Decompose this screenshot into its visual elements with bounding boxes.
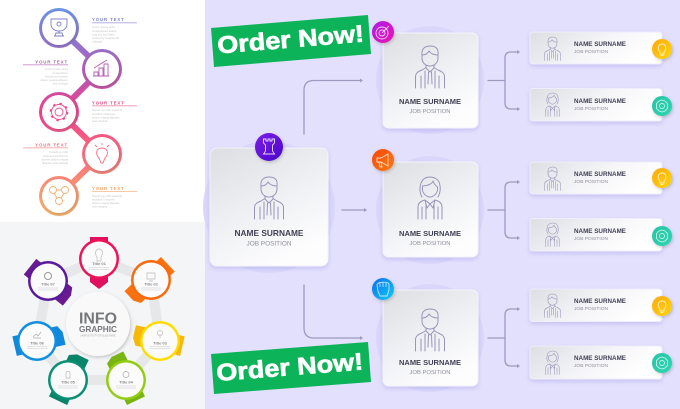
step: Title 01: Title 01 <box>92 261 107 266</box>
team card 1: NAME SURNAME <box>574 41 627 48</box>
icon: yellow bulb badge 3 <box>652 296 672 316</box>
panel: circular seven step infographic <box>12 237 185 405</box>
text block 2: consectetuer <box>52 71 68 75</box>
text block 2: erat volutpat <box>53 82 68 86</box>
banner: top Order Now <box>211 15 371 67</box>
manager card 1 <box>383 33 478 128</box>
root card: JOB POSITION <box>246 242 292 248</box>
team card 6 <box>530 346 662 379</box>
step: Title 02: Title 02 <box>144 282 159 286</box>
text block 1 <box>92 17 137 44</box>
text block 5: dolore magna aliquam <box>92 201 120 205</box>
icon: blue fist badge <box>372 278 394 300</box>
text block 1: Lorem ipsum dolor <box>92 25 115 29</box>
background: bottom-left panel <box>0 222 205 409</box>
text block 5: Nonummy nibh euismod <box>92 194 123 198</box>
text block 5: tincidunt ut laoreet <box>92 198 115 202</box>
step: Title 03 <box>131 321 185 361</box>
team card 6: NAME SURNAME <box>574 355 627 362</box>
step: Title 02 <box>124 257 175 306</box>
icon: purple chess rook badge <box>255 133 283 161</box>
text block 1: volutpat <box>92 40 102 44</box>
banner: top Order Now: Order Now! <box>216 21 365 59</box>
team card 6: JOB POSITION <box>574 363 608 368</box>
grey heptagon connector <box>37 259 160 380</box>
step: Title 04: Title 04 <box>119 380 134 384</box>
step: Title 06 <box>12 321 66 361</box>
team card 5: JOB POSITION <box>574 306 608 311</box>
text block 3: dolore magna aliquam <box>92 116 120 120</box>
team card 2 <box>530 88 662 121</box>
manager card 2: JOB POSITION <box>410 241 451 247</box>
step 2 circle with chart icon <box>82 49 122 89</box>
arrow heads <box>360 50 520 368</box>
text block 1: nonummy magna erat <box>92 36 119 40</box>
manager card 1: NAME SURNAME <box>399 97 461 106</box>
manager card 3: NAME SURNAME <box>399 358 461 367</box>
center circle: GRAPHIC <box>79 324 117 334</box>
text block 2: dolore magna aliquam <box>40 78 69 82</box>
banner: bottom Order Now <box>211 342 371 394</box>
step: Title 07 <box>24 259 75 306</box>
team card 4 <box>530 218 662 251</box>
text block 2: tincidunt ut laoreet <box>45 74 68 78</box>
team card 3: NAME SURNAME <box>574 171 627 178</box>
manager card 2: NAME SURNAME <box>399 229 461 238</box>
text block 3: tincidunt ut laoreet <box>92 112 115 116</box>
panel: org chart <box>203 21 672 392</box>
text block 1: YOUR TEXT <box>92 17 125 22</box>
text block 4: laoreet dolore magna <box>42 158 68 162</box>
team card 3: JOB POSITION <box>574 179 608 184</box>
team card 5 <box>530 289 662 322</box>
center circle: SAMPLE TEXT FOR SLIDE HERE <box>80 334 116 338</box>
step: Title 07: Title 07 <box>41 282 56 286</box>
text block 4 <box>23 142 68 165</box>
manager card 3: JOB POSITION <box>410 370 451 376</box>
text block 5: erat volutpat <box>92 204 108 208</box>
text block 4: aliquam erat volutpat <box>42 161 68 165</box>
halo circles behind cards <box>203 26 484 392</box>
team card 4: NAME SURNAME <box>574 228 627 235</box>
step: Title 03: Title 03 <box>153 340 168 346</box>
icon: teal gear badge 1 <box>652 96 672 116</box>
team card 1 <box>530 32 662 64</box>
manager card 2 <box>383 162 478 257</box>
text block 5: YOUR TEXT <box>92 186 125 191</box>
text block 3: Nonummy nibh euismod <box>92 108 123 112</box>
text block 1: consectetuer adipis <box>92 29 117 33</box>
team card 4: JOB POSITION <box>574 236 608 241</box>
center circle <box>66 292 130 356</box>
team card 1: JOB POSITION <box>574 49 608 54</box>
timeline connector <box>59 28 102 196</box>
icon: yellow bulb badge 2 <box>652 168 672 188</box>
icon: orange megaphone badge <box>372 149 394 171</box>
text block 4: Nonummy nibh <box>49 150 68 154</box>
text block 3: YOUR TEXT <box>92 100 125 106</box>
team card 2: JOB POSITION <box>574 106 608 111</box>
step 5 circle with network icon <box>39 176 79 216</box>
icon: teal gear badge 3 <box>652 353 672 373</box>
background: top-left white panel <box>0 0 205 222</box>
text block 3 <box>92 100 137 123</box>
root card <box>210 148 328 266</box>
icon: teal gear badge 2 <box>652 226 672 246</box>
team card 2: NAME SURNAME <box>574 98 627 105</box>
text block 4: YOUR TEXT <box>35 142 68 148</box>
step 1 circle with trophy icon <box>39 8 79 48</box>
root card: NAME SURNAME <box>234 228 304 238</box>
text block 4: euismod tincidunt ut <box>43 154 68 158</box>
panel: vertical timeline infographic <box>23 8 137 216</box>
center circle: INFO <box>79 310 117 328</box>
step: Title 05: Title 05 <box>61 380 76 384</box>
text block 3: erat volutpat <box>92 119 108 123</box>
team card 5: NAME SURNAME <box>574 298 627 305</box>
icon: magenta target badge <box>372 21 394 43</box>
step: Title 01 <box>79 237 119 289</box>
step: Title 05 <box>48 351 89 405</box>
step 4 circle with light bulb icon <box>82 134 122 174</box>
step 3 circle with gear icon <box>39 92 79 132</box>
background: org chart panel <box>205 0 680 409</box>
step: Title 04 <box>105 351 146 405</box>
banner: bottom Order Now: Order Now! <box>215 349 364 387</box>
text block 2: Lorem ipsum dolor <box>45 67 68 71</box>
icon: yellow bulb badge 1 <box>652 39 672 59</box>
manager card 1: JOB POSITION <box>410 109 451 115</box>
text block 5 <box>92 186 137 208</box>
step: Title 06: Title 06 <box>30 340 45 346</box>
team card 3 <box>530 162 662 194</box>
text block 2 <box>23 60 69 86</box>
text block 2: YOUR TEXT <box>35 60 68 64</box>
text block 1: cing elit, sed diam <box>92 32 115 36</box>
manager card 3 <box>383 290 478 386</box>
main connectors <box>304 52 519 366</box>
